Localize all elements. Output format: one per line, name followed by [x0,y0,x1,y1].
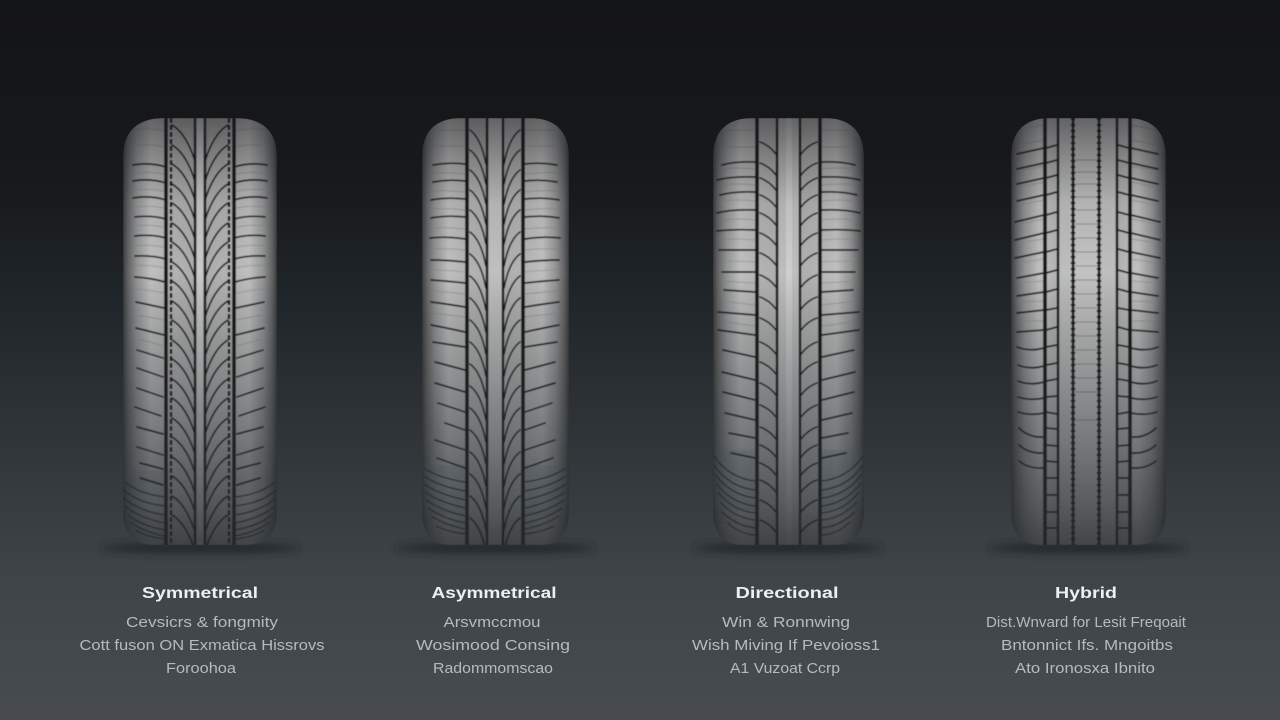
caption: asymmetrical [416,585,570,677]
text block: hybrid description: Ato Ironosxa Ibnito [1015,661,1155,677]
tire: asymmetrical [422,118,569,552]
text block: symmetrical description [80,615,324,677]
text block: asymmetrical description [416,615,570,677]
text block: asymmetrical description: Wosimood Consing [416,638,570,654]
text block: hybrid description: Bntonnict Ifs. Mngoitbs [1001,638,1173,654]
caption: directional [692,585,880,677]
heading: directional: Directional [736,585,838,602]
ground shadow: directional [693,543,883,553]
text block: asymmetrical description: Arsvmccmou [444,615,540,631]
text block: symmetrical description: Cott fuson ON Exmatica Hissrovs [80,638,324,654]
caption: symmetrical [80,585,324,677]
ground shadow: asymmetrical [395,543,595,553]
heading: asymmetrical: Asymmetrical [432,585,556,602]
text block: asymmetrical description: Radommomscao [433,661,553,677]
text block: directional description: Win & Ronnwing [722,615,850,631]
text block: hybrid description [986,615,1186,677]
heading: hybrid: Hybrid [1055,585,1117,602]
ground shadow: hybrid [988,543,1188,553]
text block: symmetrical description: Foroohoa [166,661,237,677]
text block: directional description: A1 Vuzoat Ccrp [730,661,840,677]
text block: directional description: Wish Miving If Pevoioss1 [692,638,880,654]
tire: symmetrical [123,118,277,551]
heading: symmetrical: Symmetrical [142,585,258,602]
text block: hybrid description: Dist.Wnvard for Lesit Freqoait [986,615,1186,631]
tire: directional [713,118,864,548]
tire: hybrid [1011,118,1166,548]
caption: hybrid [986,585,1186,677]
ground shadow: symmetrical [100,543,300,553]
text block: symmetrical description: Cevsicrs & fongmity [126,615,279,631]
text block: directional description [692,615,880,677]
